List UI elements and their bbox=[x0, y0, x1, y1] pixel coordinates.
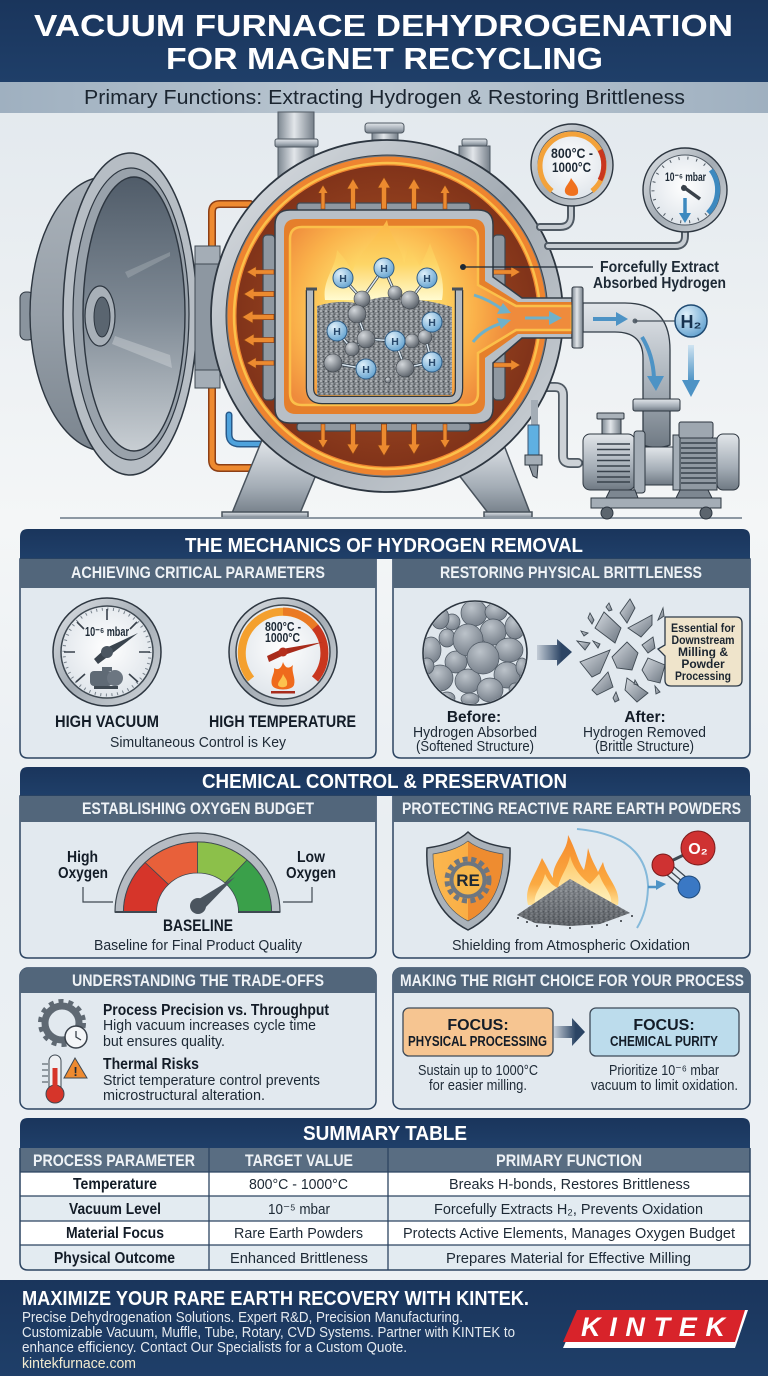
text: process precision: but ensures quality. bbox=[103, 1033, 225, 1050]
panel: oxygen budget bbox=[20, 796, 376, 958]
panel: protecting powders bbox=[393, 796, 750, 958]
callout: extract hydrogen bbox=[460, 259, 726, 292]
radiating heat arrows bbox=[242, 177, 520, 456]
caption: Baseline for Final Product Quality bbox=[94, 937, 302, 954]
box: chemical purity bbox=[590, 1008, 739, 1056]
text: thermal risks: Thermal Risks bbox=[103, 1056, 199, 1073]
caption: after: Hydrogen Removed bbox=[583, 724, 706, 741]
table rows: Material Focus bbox=[66, 1225, 164, 1242]
callout: downstream milling: Processing bbox=[675, 669, 731, 683]
footer text: Precise Dehydrogenation Solutions. Expert R&D, Precision Manufacturing. bbox=[22, 1309, 463, 1326]
table rows: Vacuum Level bbox=[69, 1201, 161, 1218]
label: high oxygen bbox=[58, 849, 113, 902]
icon: temperature gauge: 800°C - bbox=[265, 620, 301, 634]
icon: warning triangle: ! bbox=[73, 1064, 78, 1079]
hydrogen molecules: H bbox=[380, 263, 388, 275]
section heading bbox=[20, 529, 750, 559]
text: thermal risks bbox=[103, 1056, 320, 1104]
hydrogen molecules: H bbox=[391, 336, 399, 348]
icon: flames and powder pile bbox=[517, 835, 633, 929]
panel: restoring brittleness: RESTORING PHYSICAL BRITTLENESS bbox=[440, 564, 702, 582]
caption: before: Before: bbox=[447, 709, 501, 726]
temperature gauge bbox=[531, 124, 613, 206]
title banner: VACUUM FURNACE DEHYDROGENATION bbox=[34, 8, 733, 43]
text: process precision bbox=[103, 1002, 329, 1050]
panel: achieving critical parameters: ACHIEVING CRITICAL PARAMETERS bbox=[71, 564, 325, 582]
label: baseline: BASELINE bbox=[163, 916, 233, 935]
icon: gear and clock bbox=[40, 1001, 87, 1048]
summary table: SUMMARY TABLE bbox=[303, 1123, 467, 1145]
footer headline: MAXIMIZE YOUR RARE EARTH RECOVERY WITH KINTEK. bbox=[22, 1288, 529, 1310]
section heading: THE MECHANICS OF HYDROGEN REMOVAL bbox=[185, 535, 583, 557]
icon: temperature gauge bbox=[229, 598, 337, 706]
support legs bbox=[222, 440, 532, 518]
oxygen gauge bbox=[115, 833, 280, 914]
furnace illustration bbox=[20, 112, 742, 519]
shield arc and arrow bbox=[577, 829, 666, 928]
text: thermal risks: Strict temperature control prevents bbox=[103, 1072, 320, 1089]
icon: thermometer bbox=[42, 1055, 64, 1103]
box: chemical purity: CHEMICAL PURITY bbox=[610, 1034, 718, 1050]
section heading: CHEMICAL CONTROL & PRESERVATION bbox=[202, 771, 567, 793]
hydrogen molecules: H bbox=[333, 326, 341, 338]
caption: after bbox=[583, 709, 706, 755]
icon: shield bbox=[427, 832, 510, 930]
panel: restoring brittleness bbox=[393, 559, 750, 758]
table rows: Protects Active Elements, Manages Oxygen Budget bbox=[403, 1225, 736, 1242]
subtitle band: Primary Functions: Extracting Hydrogen & Restoring Brittleness bbox=[84, 87, 685, 109]
floor line bbox=[60, 517, 742, 519]
table header row bbox=[20, 1148, 750, 1172]
footer text bbox=[22, 1309, 515, 1372]
box: physical processing: FOCUS: bbox=[447, 1017, 509, 1034]
text: thermal risks: microstructural alteration. bbox=[103, 1087, 265, 1104]
subtitle band bbox=[0, 82, 768, 113]
vertical exhaust pipe and caps bbox=[275, 112, 490, 182]
footer text: kintekfurnace.com bbox=[22, 1355, 136, 1372]
box: physical processing: PHYSICAL PROCESSING bbox=[408, 1034, 547, 1050]
hydrogen molecules: H bbox=[362, 364, 370, 376]
table rows: 10⁻⁵ mbar bbox=[268, 1201, 330, 1218]
label: high temperature: HIGH TEMPERATURE bbox=[209, 712, 356, 731]
arrow: choice bbox=[554, 1018, 585, 1046]
table rows: Rare Earth Powders bbox=[234, 1225, 363, 1242]
box: chemical purity: FOCUS: bbox=[633, 1017, 695, 1034]
label: low oxygen bbox=[283, 849, 336, 902]
logo: KINTEK: KINTEK bbox=[581, 1312, 728, 1342]
caption: before bbox=[413, 709, 537, 755]
text: prioritize bbox=[591, 1062, 738, 1094]
icon: temperature gauge: 1000°C bbox=[265, 631, 300, 645]
table rows: Temperature bbox=[73, 1176, 157, 1193]
table rows bbox=[20, 1148, 750, 1270]
hydrogen molecules bbox=[324, 258, 442, 383]
vacuum pump bbox=[583, 413, 739, 519]
panel: making the right choice bbox=[393, 968, 750, 1109]
text: prioritize: vacuum to limit oxidation. bbox=[591, 1077, 738, 1094]
icon: vacuum gauge: 10⁻⁶ mbar bbox=[85, 625, 129, 639]
text: process precision: High vacuum increases cycle time bbox=[103, 1017, 316, 1034]
icon: softened structure sphere bbox=[420, 600, 528, 705]
hydrogen molecules: H bbox=[428, 357, 436, 369]
caption: after: After: bbox=[624, 709, 666, 726]
title banner bbox=[0, 0, 768, 82]
icon: vacuum gauge bbox=[53, 598, 161, 706]
label: low oxygen: Oxygen bbox=[286, 865, 336, 882]
text: prioritize: Prioritize 10⁻⁶ mbar bbox=[609, 1062, 719, 1079]
icon: shield: RE bbox=[456, 871, 480, 890]
text: sustain: Sustain up to 1000°C bbox=[418, 1062, 538, 1079]
section: chemical control bbox=[20, 767, 750, 1109]
icon: oxygen molecule bbox=[652, 831, 715, 898]
inner chamber with outlet funnel bbox=[275, 210, 572, 423]
table rows: Breaks H-bonds, Restores Brittleness bbox=[449, 1176, 690, 1193]
box: physical processing bbox=[403, 1008, 553, 1056]
table header row: PROCESS PARAMETER bbox=[33, 1152, 195, 1170]
logo: KINTEK bbox=[563, 1310, 748, 1348]
label: high oxygen: High bbox=[67, 849, 98, 866]
hydrogen molecules: H bbox=[428, 317, 436, 329]
label: low oxygen: Low bbox=[297, 849, 325, 866]
panel: oxygen budget: ESTABLISHING OXYGEN BUDGET bbox=[82, 800, 314, 818]
callout: downstream milling: Essential for bbox=[671, 621, 735, 635]
open door bbox=[20, 153, 197, 475]
arrow: before to after bbox=[537, 639, 572, 666]
extraction flow arrows bbox=[473, 295, 562, 342]
label: high vacuum: HIGH VACUUM bbox=[55, 712, 159, 731]
summary table bbox=[20, 1118, 750, 1270]
callout: downstream milling: Downstream bbox=[672, 633, 734, 647]
H2 marker bbox=[635, 305, 707, 397]
temperature gauge: 800°C - bbox=[551, 146, 593, 161]
caption: Shielding from Atmospheric Oxidation bbox=[452, 937, 690, 954]
table header row: PRIMARY FUNCTION bbox=[496, 1152, 642, 1170]
flames bbox=[325, 220, 443, 300]
drain tube bbox=[525, 400, 542, 478]
panel: trade-offs bbox=[20, 968, 376, 1109]
text: process precision: Process Precision vs. Throughput bbox=[103, 1002, 329, 1019]
caption: after: (Brittle Structure) bbox=[595, 738, 694, 755]
callout: downstream milling: Milling & bbox=[678, 645, 728, 659]
label: high oxygen: Oxygen bbox=[58, 865, 108, 882]
callout: extract hydrogen: Absorbed Hydrogen bbox=[593, 275, 726, 292]
temperature gauge: 1000°C bbox=[552, 160, 591, 175]
caption: Simultaneous Control is Key bbox=[110, 734, 286, 751]
title banner: FOR MAGNET RECYCLING bbox=[166, 41, 603, 76]
furnace body bbox=[211, 140, 563, 492]
outlet pipe bbox=[572, 287, 680, 448]
powder crucible bbox=[306, 289, 463, 400]
panel: trade-offs: UNDERSTANDING THE TRADE-OFFS bbox=[72, 972, 324, 990]
icon: warning triangle bbox=[64, 1058, 87, 1079]
callout: downstream milling bbox=[658, 617, 742, 686]
callout: extract hydrogen: Forcefully Extract bbox=[600, 259, 719, 276]
callout: downstream milling: Powder bbox=[681, 657, 725, 671]
text: sustain bbox=[418, 1062, 538, 1094]
coolant pipes bbox=[212, 204, 578, 468]
icon: brittle shards bbox=[577, 599, 665, 702]
table rows: Physical Outcome bbox=[54, 1250, 175, 1267]
icon: oxygen molecule: O₂ bbox=[688, 841, 708, 858]
table header row: TARGET VALUE bbox=[245, 1152, 353, 1170]
hydrogen molecules: H bbox=[339, 273, 347, 285]
hinge bbox=[195, 246, 220, 388]
vacuum gauge: 10⁻⁶ mbar bbox=[665, 172, 706, 184]
hydrogen molecules: H bbox=[423, 273, 431, 285]
table rows: 800°C - 1000°C bbox=[249, 1176, 348, 1193]
footer banner bbox=[0, 1280, 768, 1376]
gauge stems bbox=[540, 205, 685, 246]
text: sustain: for easier milling. bbox=[429, 1077, 527, 1094]
caption: before: (Softened Structure) bbox=[416, 738, 534, 755]
table rows: Enhanced Brittleness bbox=[230, 1250, 368, 1267]
caption: before: Hydrogen Absorbed bbox=[413, 724, 537, 741]
section heading bbox=[20, 767, 750, 796]
footer text: Customizable Vacuum, Muffle, Tube, Rotary, CVD Systems. Partner with KINTEK to bbox=[22, 1324, 515, 1341]
vacuum gauge bbox=[643, 148, 727, 232]
footer text: enhance efficiency. Contact Our Specialists for a Custom Quote. bbox=[22, 1339, 407, 1356]
table rows: Prepares Material for Effective Milling bbox=[446, 1250, 691, 1267]
table rows: Forcefully Extracts H₂, Prevents Oxidation bbox=[434, 1201, 703, 1218]
H2 marker: H₂ bbox=[680, 312, 702, 332]
section: mechanics of hydrogen removal bbox=[20, 529, 750, 758]
panel: achieving critical parameters bbox=[20, 559, 376, 758]
